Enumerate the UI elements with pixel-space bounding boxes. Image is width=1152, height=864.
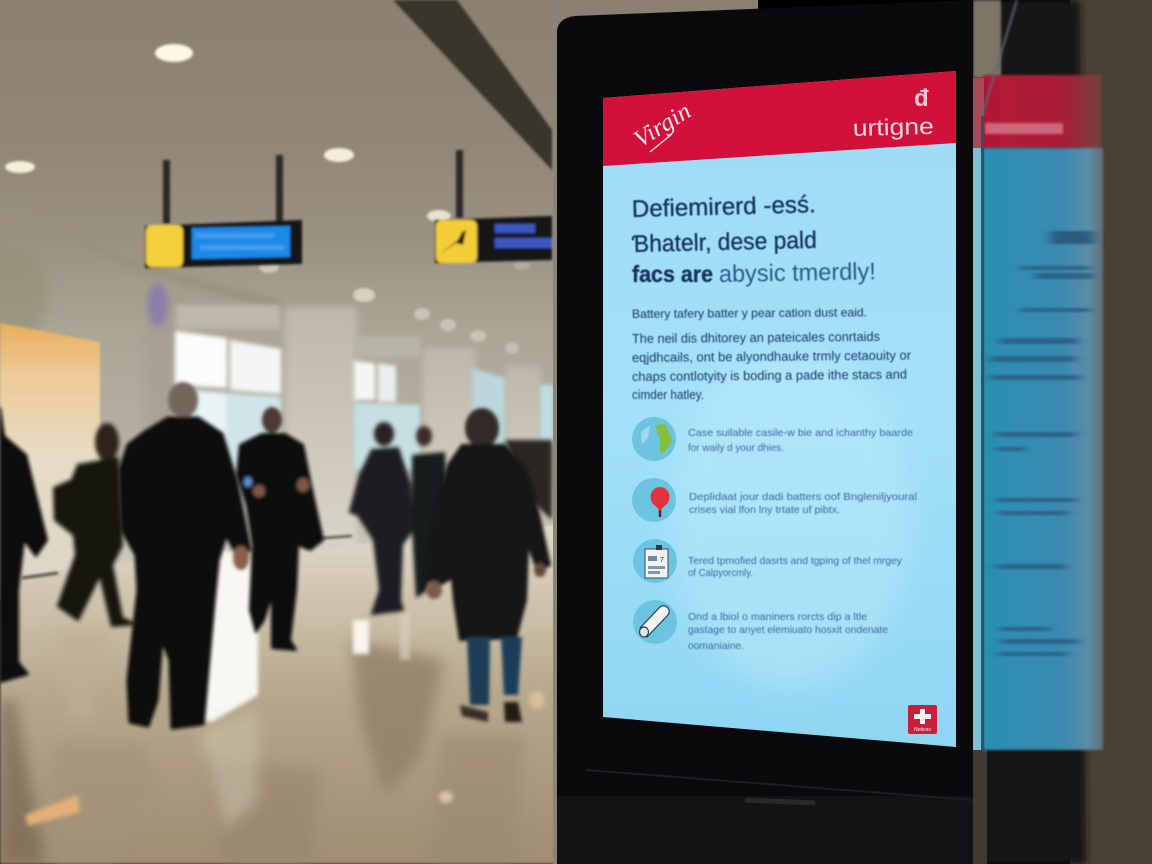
- second screen housing: [973, 0, 1086, 864]
- item 2 text: crises vial lfon lny trtate uf pibtx.: [689, 504, 840, 516]
- icon: calendar: 7: [660, 557, 664, 564]
- headline line 3: abysic tmerdly!: [719, 258, 876, 288]
- person: woman with bag: [54, 423, 136, 626]
- item 2 text: Deplidaat jour dadi batters oof Bngleniljyoural: [689, 491, 917, 503]
- icon: balloon pin: [632, 478, 676, 522]
- body paragraph: eqjdhcails, ont be alyondhauke trmly cetaouity or: [632, 348, 912, 365]
- body paragraph: [632, 329, 912, 402]
- headline line 3: facs are: [632, 261, 713, 287]
- intro line: Battery tafery batter y pear cation dust eaid.: [632, 305, 867, 321]
- person: long dark coat: [425, 408, 550, 722]
- item 4: tube: [633, 600, 888, 652]
- icon: calendar: [633, 539, 677, 583]
- person: far left: [0, 408, 47, 682]
- ceiling lights: [5, 44, 530, 354]
- person: walking toward viewer: [237, 407, 323, 650]
- kiosk base: [557, 770, 973, 864]
- background: ceiling and walls: [0, 0, 758, 600]
- item 1 text: for waily d your dhies.: [688, 442, 784, 454]
- digital kiosk housing: [557, 0, 973, 864]
- item 2 text: [689, 491, 917, 516]
- second screen red header: [983, 75, 1101, 149]
- badge: red cross: [908, 705, 937, 734]
- hanging sign: right: [435, 150, 552, 263]
- floor reflections: [0, 630, 525, 864]
- body paragraph: cimder hatley.: [632, 387, 704, 402]
- item 2: balloon pin: [632, 478, 917, 522]
- kiosk left edge: [553, 0, 557, 864]
- second screen blurred text lines: [990, 231, 1094, 656]
- headline line 2: Ɓhatelr, dese pald: [632, 227, 817, 258]
- headline line 3: [632, 258, 876, 288]
- item 3 text: [688, 555, 903, 579]
- item 4 text: Ond a lbiol o maniners rorcts dip a ltle: [688, 611, 867, 623]
- second screen body: [983, 148, 1103, 750]
- screen: notice: [603, 71, 956, 747]
- screen body: [603, 71, 956, 747]
- logo mark: đ: [914, 85, 929, 112]
- windows: [175, 305, 554, 470]
- logo word: urtigne: [852, 113, 934, 141]
- floor light reflections: [25, 550, 545, 830]
- item 3 text: Tered tpmofied dasrts and tgping of thel mrgey: [688, 555, 903, 567]
- floor: [0, 525, 556, 864]
- item 4 text: [688, 611, 888, 652]
- wall glow panel: [0, 323, 100, 590]
- item 1: globe: [632, 417, 913, 461]
- item 4 text: gastage to anyet elemiuato hosxit ondenate: [688, 624, 888, 636]
- columns: [285, 307, 541, 547]
- baseboard: [22, 536, 352, 578]
- item 1 text: Case suilable casile-w bie and ichanthy baarde: [688, 427, 913, 439]
- item 1 text: [688, 427, 913, 454]
- second screen in background: [973, 0, 1103, 864]
- badge: red cross: Notices: [914, 727, 931, 733]
- icon: tube: [633, 600, 677, 644]
- person: man in dark suit: [120, 382, 250, 728]
- item 3: calendar: [633, 539, 903, 583]
- logo: urtigne: [852, 85, 934, 141]
- people: distant group: [350, 422, 552, 614]
- right wall: [1070, 0, 1152, 864]
- icon: globe: [632, 417, 676, 461]
- ceiling beam: [393, 0, 552, 170]
- hanging sign: left: [145, 155, 302, 268]
- body paragraph: chaps contlotyity is boding a pade ithe stacs and: [632, 367, 907, 384]
- red header band: [603, 71, 956, 166]
- item 4 text: oomaniaine.: [688, 640, 744, 652]
- item 3 text: of Calpyorcmly.: [688, 567, 753, 579]
- body paragraph: The neil dis dhitorey an pateicales conrtaids: [632, 329, 880, 346]
- logo: Virgin: Virgin: [629, 98, 696, 153]
- headline line 1: Defiemirerd -esś.: [631, 191, 816, 223]
- screen glow: [670, 350, 910, 690]
- headline: [631, 191, 876, 288]
